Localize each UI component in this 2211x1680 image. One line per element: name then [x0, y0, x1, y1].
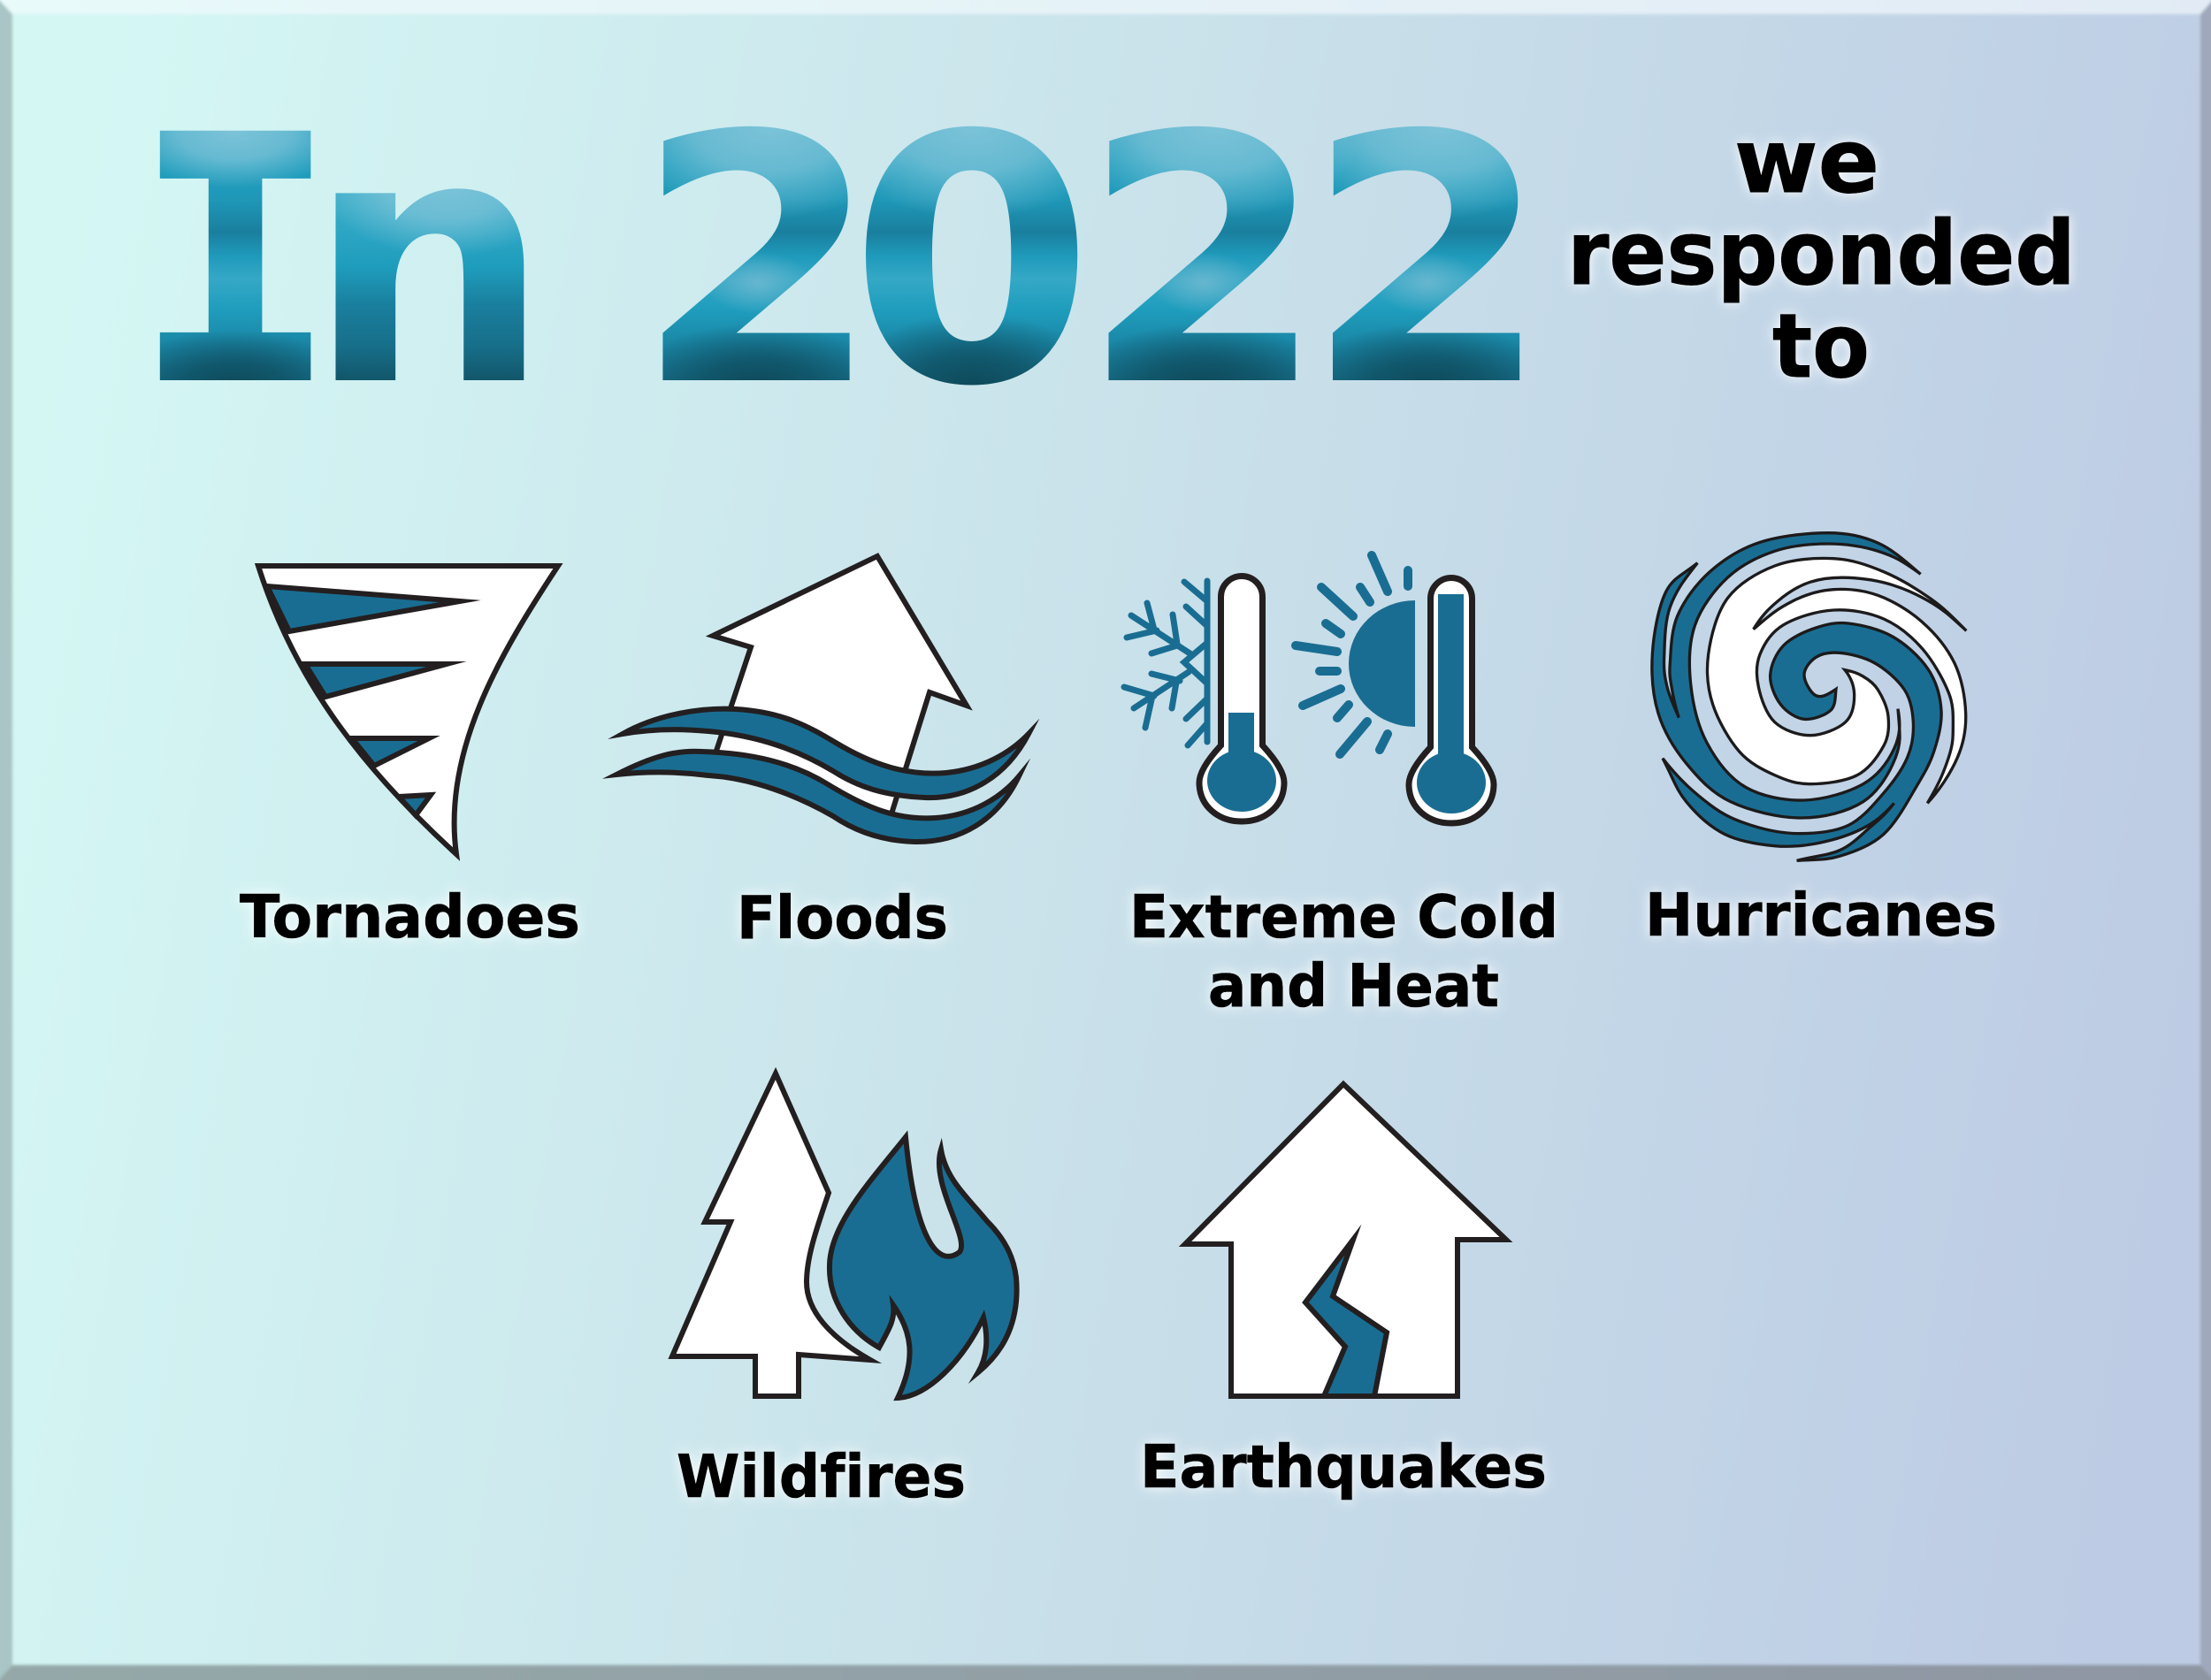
label: Extreme Cold and Heat [1129, 882, 1558, 1020]
label: Wildfires: Wildfires [677, 1442, 966, 1511]
heading: we responded to: to [1772, 294, 1870, 398]
label: Tornadoes: Tornadoes [240, 882, 580, 951]
title: In 2022 [134, 62, 1550, 462]
heading: we responded to: we [1734, 110, 1879, 213]
label: Extreme Cold and Heat: and Heat [1208, 951, 1499, 1020]
label: Earthquakes: Earthquakes [1140, 1432, 1547, 1501]
title year: 2022: 2022 [635, 62, 1550, 462]
icon: earthquake house [1185, 1084, 1506, 1396]
label: Hurricanes: Hurricanes [1645, 881, 1997, 950]
title word: In: n [307, 64, 551, 462]
icon: cold thermometer [1199, 577, 1284, 821]
icon: tornado [258, 566, 558, 854]
icon: hurricane [1652, 533, 1966, 860]
heading: we responded to: responded [1567, 202, 2076, 305]
icon: snowflake [1124, 581, 1207, 745]
label: Floods: Floods [737, 883, 948, 952]
title word: In: I [134, 67, 336, 457]
icon: hot thermometer [1409, 578, 1494, 823]
heading: we responded to [1567, 110, 2076, 398]
label: Extreme Cold and Heat: Extreme Cold [1129, 882, 1558, 951]
icon: sun [1296, 555, 1415, 754]
icon: wildfire [672, 1073, 1017, 1398]
icon: flood [616, 556, 1029, 842]
